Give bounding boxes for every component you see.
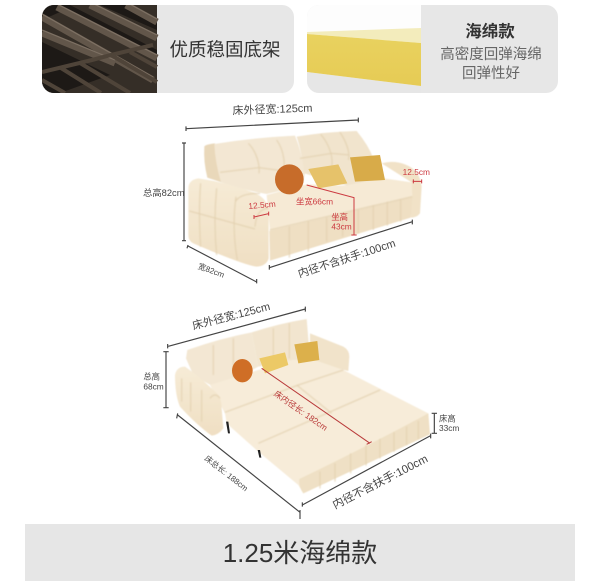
red labels: 坐高 [331,212,348,222]
sofa seams [189,132,412,260]
dimension labels [143,101,397,281]
sofa bed body [175,319,430,493]
icon: mustard pillow [294,341,319,363]
photo: yellow foam block [307,5,421,93]
sofa legs [226,422,261,458]
icon: yellow pillow [259,352,288,373]
dimension labels: 床外径宽:125cm [191,299,272,333]
text: foam description: 回弹性好 [462,65,520,82]
dimension labels: 床高 [439,413,456,423]
dimension labels: 内径不含扶手:100cm [330,451,430,512]
diagram: closed sofa with dimensions [143,101,430,283]
icon: orange round pillow [275,164,304,194]
icon: yellow pillow [308,164,347,188]
red label: 床内径长: 182cm [272,388,330,433]
dimension labels: 床外径宽:125cm [232,101,313,117]
sofa body [188,131,422,267]
dimension labels: 33cm [439,423,459,433]
dimension labels: 床总长: 188cm [203,453,250,493]
diagram: opened sofa bed with dimensions [143,299,459,519]
text: foam title: 海绵款 [465,22,515,41]
dimension lines [182,118,412,283]
dimension labels: 总高 [143,372,160,382]
red labels: 坐宽66cm [296,196,333,206]
dimension labels: 68cm [143,381,164,391]
text: foam description: 高密度回弹海绵 [440,46,542,63]
text: frame caption: 优质稳固底架 [169,39,281,60]
panel: foam feature [307,5,558,93]
text: foam description [440,46,542,82]
icon: mustard pillow [350,155,385,182]
red dimension lines [254,179,422,235]
dimension lines [163,307,437,519]
dimension labels: 内径不含扶手:100cm [296,236,397,281]
red dimension line [262,368,372,444]
red labels [248,167,430,231]
dimension labels: 宽82cm [197,261,226,280]
dimension labels [143,299,459,512]
red labels: 12.5cm [403,167,430,177]
footer band [25,524,575,581]
panel: frame feature [42,2,294,93]
dimension labels: 总高82cm [143,187,185,198]
red labels: 12.5cm [248,199,276,211]
bed seams and ribs [182,323,418,488]
photo: slatted frame [42,2,157,93]
footer title: 1.25米海绵款 [223,538,377,568]
red labels: 43cm [331,221,352,231]
icon: orange round pillow [232,359,253,382]
